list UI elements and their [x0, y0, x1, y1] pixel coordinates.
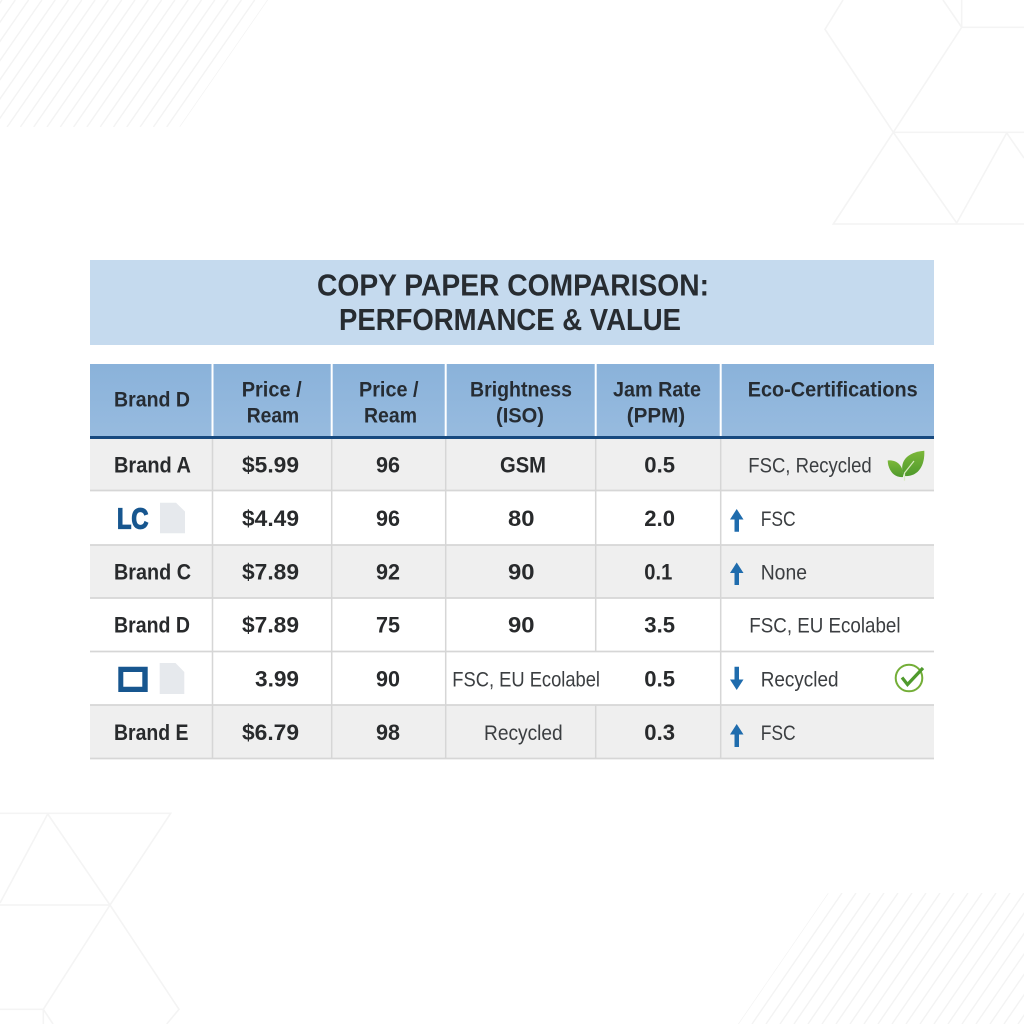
icon: green check circle: [896, 665, 923, 691]
title line 2: PERFORMANCE & VALUE: [339, 302, 681, 337]
row: LC brand: [117, 503, 796, 536]
row: Brand C: None: [761, 560, 807, 584]
table header row: Eco-Certifications: [748, 378, 918, 402]
row: Brand C: [114, 559, 807, 585]
row: Brand A: [114, 451, 924, 481]
row: rectangle-logo brand: [118, 663, 923, 694]
title banner: [90, 260, 934, 345]
row: Brand C: $7.89: [242, 559, 299, 584]
icon: up arrow: [730, 724, 744, 747]
row: Brand E: 98: [376, 720, 400, 745]
comparison table: [90, 364, 934, 759]
row: rectangle-logo brand: 3.99: [255, 667, 299, 692]
row: Brand D: $7.89: [242, 613, 299, 638]
row: rectangle-logo brand: Recycled: [761, 668, 838, 692]
row: LC brand: 96: [376, 506, 400, 531]
icon: paper sheet: [160, 503, 185, 533]
logo: blue rectangle: [118, 667, 148, 692]
icon: down arrow: [730, 667, 744, 690]
table header row: Brand D: [114, 388, 190, 412]
table header row: Jam Rate: [613, 378, 701, 402]
logo: LC: LC: [117, 504, 149, 536]
icon: up arrow: [730, 509, 744, 532]
row: Brand A: 96: [376, 452, 400, 477]
row: Brand E: [114, 720, 796, 747]
row: Brand C: Brand C: [114, 559, 191, 584]
table header row: Brightness: [470, 378, 572, 402]
row: Brand A: $5.99: [242, 452, 299, 477]
table header row: Price /: [359, 378, 419, 402]
row: Brand D: Brand D: [114, 613, 190, 638]
row: Brand A: FSC, Recycled: [748, 453, 872, 477]
icon: paper sheet: [160, 663, 184, 694]
row: Brand E: FSC: [761, 721, 796, 745]
table header row: [90, 364, 934, 439]
row: Brand A: 0.5: [644, 452, 675, 477]
row: Brand E: 0.3: [644, 720, 675, 745]
row: Brand D: 90: [508, 613, 534, 638]
row: Brand C: 0.1: [644, 559, 672, 584]
row: Brand C: 90: [508, 559, 534, 584]
row: rectangle-logo brand: 90: [376, 667, 400, 692]
table header row: (PPM): [627, 403, 685, 427]
row: Brand D: [114, 613, 900, 638]
row: Brand E: $6.79: [242, 720, 299, 745]
row: rectangle-logo brand: 0.5: [644, 667, 675, 692]
row: Brand A: Brand A: [114, 452, 191, 477]
table header row: Ream: [247, 403, 299, 427]
icon: up arrow: [730, 562, 744, 585]
table header row: (ISO): [496, 403, 544, 427]
row: rectangle-logo brand: FSC, EU Ecolabel: [452, 668, 600, 692]
row: Brand A: GSM: [500, 452, 546, 477]
row: LC brand: FSC: [761, 507, 796, 531]
row: Brand E: Brand E: [114, 720, 188, 745]
row: Brand E: Recycled: [484, 721, 563, 745]
row: Brand D: FSC, EU Ecolabel: [749, 614, 900, 638]
row: LC brand: 80: [508, 506, 534, 531]
row: Brand D: 75: [376, 613, 400, 638]
row: LC brand: 2.0: [644, 506, 675, 531]
row: Brand C: 92: [376, 559, 400, 584]
table header row: Price /: [242, 378, 302, 402]
icon: green leaves: [888, 451, 924, 481]
row: Brand D: 3.5: [644, 613, 675, 638]
title line 1: COPY PAPER COMPARISON:: [317, 268, 709, 303]
row: LC brand: $4.49: [242, 506, 299, 531]
table header row: Ream: [364, 403, 417, 427]
